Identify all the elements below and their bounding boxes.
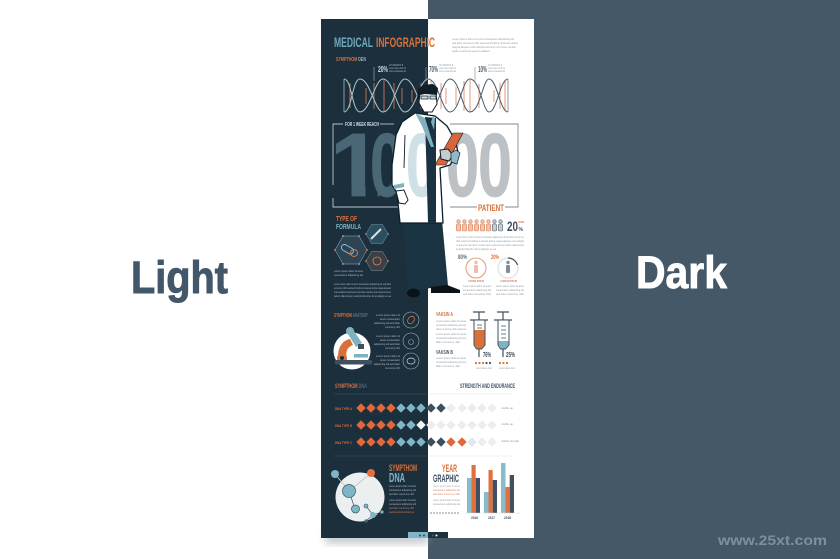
anatomy item 1: adipiscing elit sed diam [374, 321, 400, 325]
label: for 1 week reach: FOR 1 WEEK REACH [345, 122, 379, 128]
patient text block: Lorem ipsum dolor sit amet consectetur adipiscing elit sed diam nonummy [456, 235, 524, 239]
anatomy item 1 [374, 312, 419, 329]
small dotted axis [430, 512, 460, 514]
bar chart: 2018 [504, 516, 511, 520]
intro text block [452, 37, 518, 53]
big number 10000: 1 [330, 116, 382, 216]
anatomy item 1: nonummy nibh [385, 325, 400, 329]
patient text block [456, 235, 524, 251]
vaksin a text: consectetur adipiscing elit sed [436, 336, 466, 340]
intro text block: magna aliquam erat volutpat wisi enim ad minim veniam [452, 45, 516, 49]
vaksin a text: Lorem ipsum dolor sit amet [436, 319, 466, 323]
anatomy item 2: nonummy nibh [385, 346, 400, 350]
vaksin a text: consectetur adipiscing elit sed [436, 323, 466, 327]
anatomy item 1: amet consectetur [380, 317, 400, 321]
gauge: 20 percent: Lorem ipsum dolor sit amet [496, 284, 524, 288]
anatomy item 3: adipiscing elit sed diam [374, 362, 400, 366]
symptom dna text: sed diam nonummy nibh [389, 492, 414, 496]
icon: microscope [334, 327, 372, 370]
year graphic text: sed diam nonummy nibh [433, 492, 460, 496]
dark background half [428, 0, 840, 559]
tablet [435, 133, 463, 165]
title: INFOGRAPHIC [376, 35, 435, 50]
year graphic text: consectetur adipiscing elit [433, 502, 460, 506]
vaksin a text: diam nonummy nibh [436, 340, 460, 344]
heading: year graphic [433, 463, 459, 485]
stat: 10%: Lorem ipsum dolor sit [488, 66, 505, 70]
shirt and tie [425, 117, 436, 223]
doctor illustration [392, 84, 463, 298]
heading: type of formula: TYPE OF [336, 214, 357, 223]
frame: patient reach [333, 124, 518, 207]
stat: 10%: 10% [478, 65, 487, 74]
bottom page tab [408, 532, 448, 538]
icon: syringe hexagon [365, 224, 389, 244]
gauge: 80 percent: LOREM IPSUM [468, 280, 484, 283]
dna row B [335, 421, 513, 429]
year graphic text: Lorem ipsum dolor sit amet [433, 484, 460, 488]
big number 10000: 0 [446, 116, 479, 216]
dna row C: DNA TYPE C [335, 440, 352, 445]
stat: 20%: amet consectetur elit [389, 69, 406, 73]
panel: light half [428, 19, 534, 538]
trousers [403, 220, 448, 291]
vaksin a text: Lorem ipsum dolor sit amet [436, 332, 466, 336]
big number 10000 [330, 116, 512, 216]
network circle diagram [331, 469, 384, 523]
syringe: blue 25 percent [494, 312, 515, 359]
stat: 70% [426, 63, 456, 81]
people icons [456, 220, 503, 231]
heading: symptom dna: SYMPTHOM DNA [335, 384, 367, 390]
stat: 20 percent patients: 20 [507, 218, 518, 234]
dna row C [335, 438, 519, 446]
shoe left [407, 288, 420, 298]
symptom dna text: Lorem ipsum dolor sit amet [389, 498, 416, 502]
vaksin a text [436, 319, 466, 344]
stat: 20%: 20% [378, 65, 388, 74]
gauge: 80 percent: Lorem ipsum dolor sit amet [463, 284, 491, 288]
intro text block: quis nostrud exerci tation [452, 49, 490, 53]
gauge: 80 percent: 80% [458, 254, 467, 261]
heading: symptom dna large [389, 463, 417, 485]
heading: symptom anatomy: SYMPTHOM ANATOMY [334, 313, 368, 319]
anatomy item 3 [374, 353, 419, 370]
cuff [451, 150, 460, 164]
stat: 70%: amet consectetur elit [439, 69, 456, 73]
stat: 20 percent patients: MAN [518, 221, 524, 224]
panel shadow [325, 530, 428, 544]
icon: capsule hexagon [365, 252, 389, 270]
symptom dna text: sed diam nonummy nibh [389, 506, 414, 510]
anatomy item 2: Lorem ipsum dolor sit [376, 334, 400, 338]
gauge: 20 percent: consectetur adipiscing elit [496, 288, 524, 292]
anatomy item 3: amet consectetur [380, 358, 400, 362]
anatomy item 2 [374, 333, 419, 350]
syringe: orange 76 percent [470, 312, 491, 359]
dna row A [335, 404, 513, 412]
heading: Dark: Dark [636, 247, 728, 298]
stat: 70%: 70% [429, 65, 438, 74]
stat: 10%: amet consectetur elit [488, 69, 505, 73]
stat: 70%: 10 SYMPHONY B [439, 63, 453, 67]
heading: vaksin a: VAKSIN A [436, 312, 453, 318]
symptom dna text [389, 484, 416, 514]
rating dots: Lorem ipsum dolor [476, 366, 492, 370]
stat: 10%: 10 SYMPHONY B [488, 63, 502, 67]
formula text block: consectetur adipiscing elit [334, 273, 363, 277]
hair [417, 84, 438, 100]
syringe: blue 25 percent: 25% [506, 352, 515, 359]
bar chart: 2016 [471, 516, 478, 520]
heading: symptom dna large: SYMPTHOM [389, 463, 417, 473]
vaksin b text: diam nonummy nibh [436, 364, 460, 368]
stat: 20% [374, 63, 406, 81]
heading: type of formula [336, 214, 361, 231]
heading: strength and endurance: STRENGTH AND ENDURANCE [460, 383, 515, 390]
anatomy item 2: amet consectetur [380, 338, 400, 342]
year graphic text: Lorem ipsum dolor sit amet [433, 498, 460, 502]
watermark: www.25xt.com [717, 532, 827, 548]
stat: 10% [475, 63, 505, 81]
dna helix chart [344, 79, 508, 112]
heading: type of formula: FORMULA [336, 222, 361, 231]
patient text block: suscipit lobortis nisl ut aliquip ex ea [456, 247, 496, 251]
patient text block: nibh euismod tincidunt ut laoreet dolore magna aliquam erat volutpat [456, 239, 524, 243]
symptom dna text: Lorem ipsum dolor sit amet [389, 484, 416, 488]
anatomy item 3: Lorem ipsum dolor sit [376, 354, 400, 358]
left cuff [394, 183, 404, 189]
anatomy item 2: adipiscing elit sed diam [374, 342, 400, 346]
bar chart [465, 463, 520, 520]
vaksin b text: consectetur adipiscing elit sed [436, 360, 466, 364]
anatomy item 1: Lorem ipsum dolor sit [376, 313, 400, 317]
gauge: 20 percent: sed diam nonummy nibh [496, 292, 524, 296]
formula text block: tation ullamcorper suscipit lobortis nisl ut aliquip ex ea [334, 294, 391, 298]
heading: Light: Light [131, 252, 228, 303]
vaksin b text: Lorem ipsum dolor sit amet [436, 356, 466, 360]
dna row A: DNA TYPE A [335, 406, 352, 411]
formula text block: Lorem ipsum dolor sit amet consectetur adipiscing elit sed diam [334, 282, 391, 286]
rating dots [475, 362, 515, 370]
intro text block: Lorem ipsum dolor sit amet consectetur adipiscing elit [452, 37, 514, 41]
vaksin a text: diam nonummy nibh euismod [436, 327, 466, 331]
heading: vaksin b: VAKSIN B [436, 350, 453, 356]
gauge: 20 percent: 20% [491, 254, 499, 261]
symptom dna text: consectetur adipiscing elit [389, 502, 416, 506]
stat: 20 percent patients: % [518, 227, 524, 233]
syringe: orange 76 percent: 76% [483, 352, 491, 359]
formula text block: nonummy nibh euismod tincidunt ut laoreet dolore magna aliquam [334, 286, 391, 290]
formula text block: erat volutpat ut wisi enim ad minim veniam quis nostrud exerci [334, 290, 391, 294]
panel: dark half [321, 19, 428, 538]
shoe right [431, 285, 460, 293]
head [419, 92, 437, 112]
dna row A: middle up [501, 406, 513, 410]
vaksin b text [436, 356, 466, 368]
heading: symptom dna large: DNA [389, 470, 405, 485]
title [334, 35, 435, 50]
teal scarf [415, 113, 435, 147]
dna row B: middle up [501, 422, 513, 426]
coat seam [404, 135, 405, 168]
gauge: 80 percent [458, 254, 491, 296]
symptom dna text: consectetur adipiscing elit [389, 488, 416, 492]
left hand [396, 190, 408, 204]
coat [392, 113, 458, 223]
title: MEDICAL [334, 35, 373, 50]
dna row B: DNA TYPE B [335, 423, 352, 428]
stat: 20%: 10 SYMPHONY B [389, 63, 403, 67]
gloved hand [440, 149, 453, 161]
subheading: symptom den: SYMPTHOM DEN [336, 57, 366, 63]
big number 10000: 0 [370, 116, 404, 216]
big number 10000: 0 [478, 116, 512, 216]
stat: 20%: Lorem ipsum dolor sit [389, 66, 406, 70]
year graphic text [433, 484, 460, 506]
icon: pill hexagon [334, 235, 368, 265]
bar chart: 2017 [488, 516, 495, 520]
heading: year graphic: GRAPHIC [433, 473, 459, 485]
symptom dna text: euismod tincidunt ut [389, 510, 414, 514]
stat: 70%: Lorem ipsum dolor sit [439, 66, 456, 70]
coat tinted zero: 0 [406, 116, 438, 216]
gauge: 80 percent: sed diam nonummy nibh [463, 292, 491, 296]
gauge: 20 percent: LOREM IPSUM [500, 280, 517, 283]
formula text block [334, 269, 391, 298]
anatomy item 3: nonummy nibh [385, 366, 400, 370]
dna row C: middle strength [501, 439, 519, 443]
patient text block: ut wisi enim ad minim veniam quis nostrud exerci tation ullamcorper [456, 243, 524, 247]
glasses [421, 96, 436, 99]
year graphic text: consectetur adipiscing elit [433, 488, 460, 492]
intro text block: sed diam nonummy nibh euismod tincidunt ut laoreet dolore [452, 41, 518, 45]
gauge: 80 percent: consectetur adipiscing elit [463, 288, 491, 292]
label: patient: PATIENT [478, 203, 504, 213]
rating dots: Lorem ipsum dolor [499, 366, 515, 370]
formula text block: Lorem ipsum dolor sit amet [334, 269, 363, 273]
gauge: 20 percent [491, 254, 524, 296]
heading: year graphic: YEAR [442, 463, 457, 475]
